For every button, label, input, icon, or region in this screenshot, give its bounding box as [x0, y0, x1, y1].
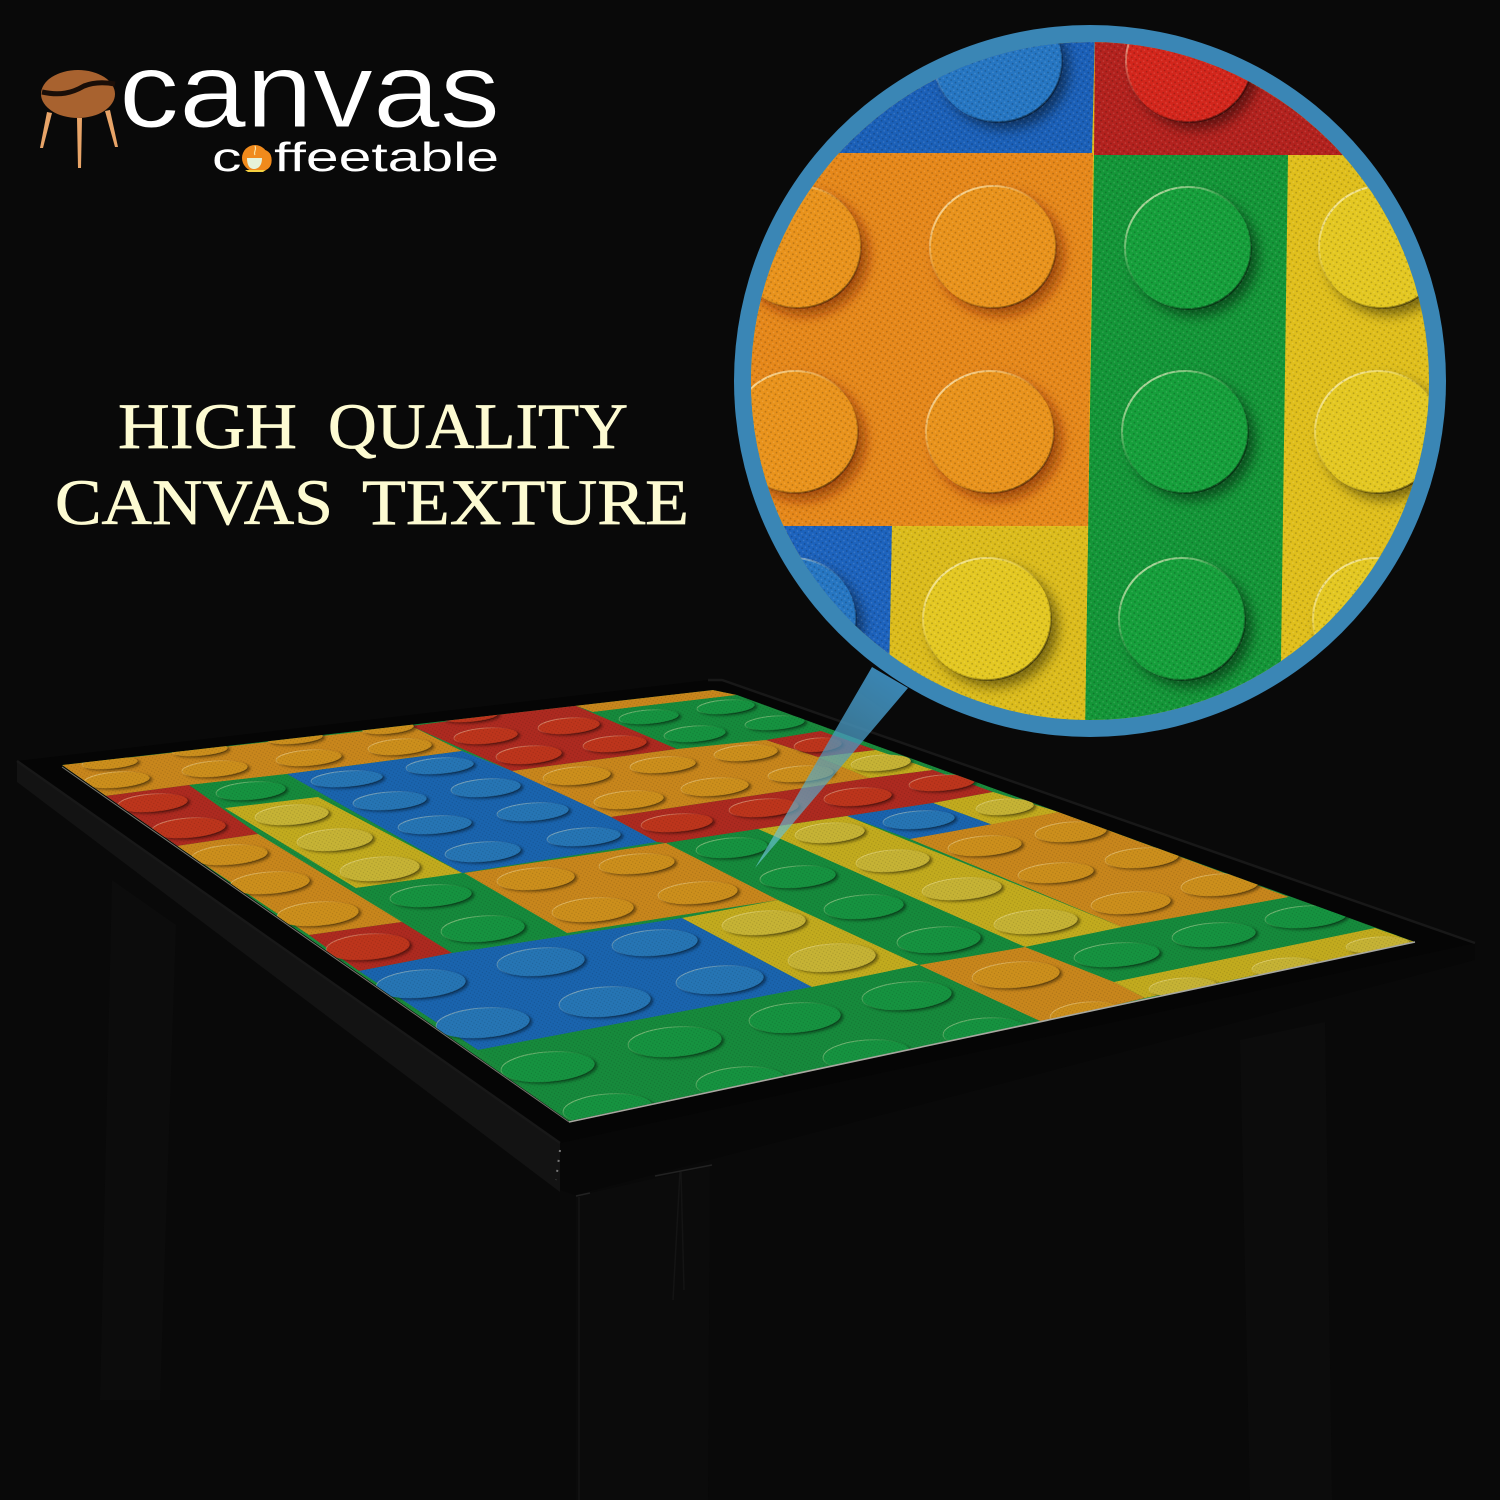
icon: coffee cup [242, 145, 268, 172]
logo word: canvas: canvas [119, 30, 500, 150]
zoomed canvas weave [740, 30, 1440, 730]
blue studs [311, 756, 956, 1041]
title: high quality canvas texture [55, 391, 689, 539]
title: high quality canvas texture: HIGH [118, 391, 297, 463]
title: high quality canvas texture: QUALITY [328, 391, 628, 463]
title: high quality canvas texture: CANVAS [55, 467, 333, 539]
canvas texture overlay [64, 690, 1412, 1120]
zoomed blue studs [800, 43, 1076, 638]
zoomed red stud [1125, 44, 1262, 136]
magnifier circle [730, 0, 1446, 737]
yellow studs [254, 753, 1410, 998]
green studs [215, 698, 1348, 1127]
tiles [62, 690, 1414, 1121]
zoomed green studs [1119, 187, 1251, 680]
callout pointer [755, 667, 908, 868]
logo word: coffeetable: coffeetable [212, 134, 499, 180]
table legs [100, 880, 1332, 1500]
table frame [17, 680, 1475, 1195]
zoomed yellow studs [923, 186, 1445, 680]
table top: lego canvas print [62, 690, 1414, 1121]
title: high quality canvas texture: TEXTURE [362, 467, 689, 539]
zoomed tiles [740, 30, 1440, 730]
logo [40, 30, 500, 180]
table top edge highlights [62, 767, 1415, 1122]
red studs [117, 708, 975, 963]
icon: coffee bean table [40, 70, 118, 168]
zoomed orange studs [732, 186, 1056, 493]
orange studs [82, 720, 1260, 1031]
